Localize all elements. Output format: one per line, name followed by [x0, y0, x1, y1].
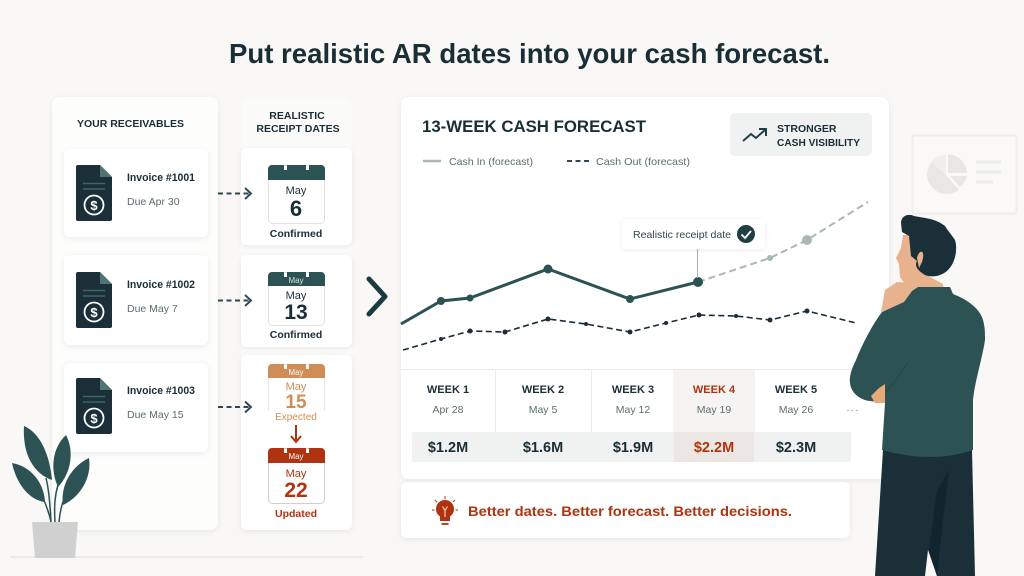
- heading: realistic receipt dates: REALISTIC: [269, 110, 325, 122]
- legend: Cash Out (forecast): [596, 156, 690, 168]
- week 4: May 19: [697, 404, 731, 416]
- week 5: WEEK 5: [775, 384, 817, 396]
- date card: May 6: May: [286, 185, 307, 197]
- heading: 13-week cash forecast: 13-WEEK CASH FORECAST: [422, 117, 647, 136]
- invoice card 1002: Due May 7: [127, 303, 178, 315]
- arrow: moved date: [291, 425, 301, 442]
- invoice card 1003: Invoice #1003: [127, 385, 195, 397]
- invoice card 1001: Due Apr 30: [127, 196, 180, 208]
- date card: May 13: [241, 255, 352, 347]
- date card: May 13: 13: [284, 301, 308, 324]
- invoice card 1001: Invoice #1001: [127, 172, 195, 184]
- raised hand: [881, 282, 911, 312]
- shirt: [850, 287, 985, 457]
- callout: realistic receipt date: [622, 219, 765, 278]
- face and neck: [896, 235, 945, 295]
- forecast table: [401, 370, 889, 462]
- invoice card 1002: [64, 255, 208, 345]
- calendar: May 15 expected: May: [288, 368, 304, 377]
- panel: takeaway: [401, 482, 850, 538]
- calendar: May 15 expected: 15: [285, 392, 307, 413]
- week 3: [612, 384, 654, 456]
- more columns dots: [847, 410, 858, 411]
- week 1: [427, 384, 469, 456]
- invoice card 1003: $: [90, 411, 98, 426]
- plant: [12, 426, 89, 558]
- arrow: big chevron: [369, 279, 385, 314]
- invoice card 1002: Invoice #1002: [127, 279, 195, 291]
- wall chart decoration: [912, 136, 1016, 214]
- cash in actual line: [401, 264, 703, 324]
- heading: your receivables: YOUR RECEIVABLES: [77, 118, 184, 130]
- invoice card 1001: $: [90, 198, 98, 213]
- badge: stronger cash visibility: STRONGER: [777, 123, 837, 135]
- week 4: WEEK 4: [693, 384, 736, 396]
- date card: May 13: Confirmed: [270, 329, 322, 341]
- legend: [423, 156, 690, 168]
- week 5: [775, 384, 817, 456]
- week 2: May 5: [529, 404, 557, 416]
- week 4: $2.2M: [694, 440, 734, 456]
- calendar: May 22 updated: [268, 448, 325, 520]
- date card: May 6: Confirmed: [270, 228, 322, 240]
- week 2: $1.6M: [523, 440, 563, 456]
- date card: May 13: May: [288, 276, 304, 285]
- week 2: [522, 384, 564, 456]
- calendar: May 15 expected: [268, 364, 325, 423]
- calendar: May 15 expected: May: [286, 381, 307, 393]
- calendar: May 22 updated: 22: [284, 479, 308, 502]
- cash in forecast line: [698, 202, 868, 282]
- man looking at the forecast: [850, 215, 985, 576]
- calendar: May 15 expected: Expected: [275, 412, 317, 423]
- calendar: May 22 updated: May: [288, 452, 304, 461]
- line chart: [401, 202, 868, 350]
- badge: stronger cash visibility: [730, 113, 872, 156]
- week 3: WEEK 3: [612, 384, 654, 396]
- ground line: [10, 556, 363, 558]
- invoice card 1003: Due May 15: [127, 409, 184, 421]
- week 1: Apr 28: [433, 404, 464, 416]
- date card: May 6: [241, 148, 352, 245]
- week 1: $1.2M: [428, 440, 468, 456]
- panel: realistic receipt dates: RECEIPT DATES: [256, 123, 340, 135]
- week 2: WEEK 2: [522, 384, 564, 396]
- legend: Cash In (forecast): [449, 156, 533, 168]
- takeaway text: Better dates. Better forecast. Better decisions.: [468, 503, 792, 519]
- icon: light bulb: [432, 496, 458, 524]
- calendar: May 22 updated: Updated: [275, 508, 317, 520]
- panel: your receivables: [52, 97, 218, 530]
- calendar: May 22 updated: May: [286, 468, 307, 480]
- ear: [917, 252, 923, 268]
- invoice card 1003: [64, 363, 208, 452]
- week 3: May 12: [616, 404, 650, 416]
- date card: May 13: May: [286, 290, 307, 302]
- callout: realistic receipt date: Realistic receipt date: [633, 229, 731, 241]
- week 3: $1.9M: [613, 440, 653, 456]
- week 1: WEEK 1: [427, 384, 469, 396]
- trousers: [875, 450, 975, 576]
- hair: [901, 215, 956, 276]
- folded hand: [871, 384, 885, 403]
- panel: realistic receipt dates: [241, 97, 352, 530]
- cash out line: [403, 308, 856, 350]
- title: Put realistic AR dates into your cash forecast.: [229, 38, 830, 69]
- badge: stronger cash visibility: CASH VISIBILITY: [777, 137, 860, 149]
- date card: May 6: 6: [290, 196, 302, 221]
- date card: May 15 to May 22: [241, 355, 352, 530]
- week 4: [693, 384, 736, 456]
- week 5: May 26: [779, 404, 813, 416]
- panel: 13-week cash forecast: [401, 97, 889, 479]
- week 5: $2.3M: [776, 440, 816, 456]
- arrows: invoices to dates: [218, 188, 251, 412]
- invoice card 1001: [64, 149, 208, 237]
- invoice card 1002: $: [90, 305, 98, 320]
